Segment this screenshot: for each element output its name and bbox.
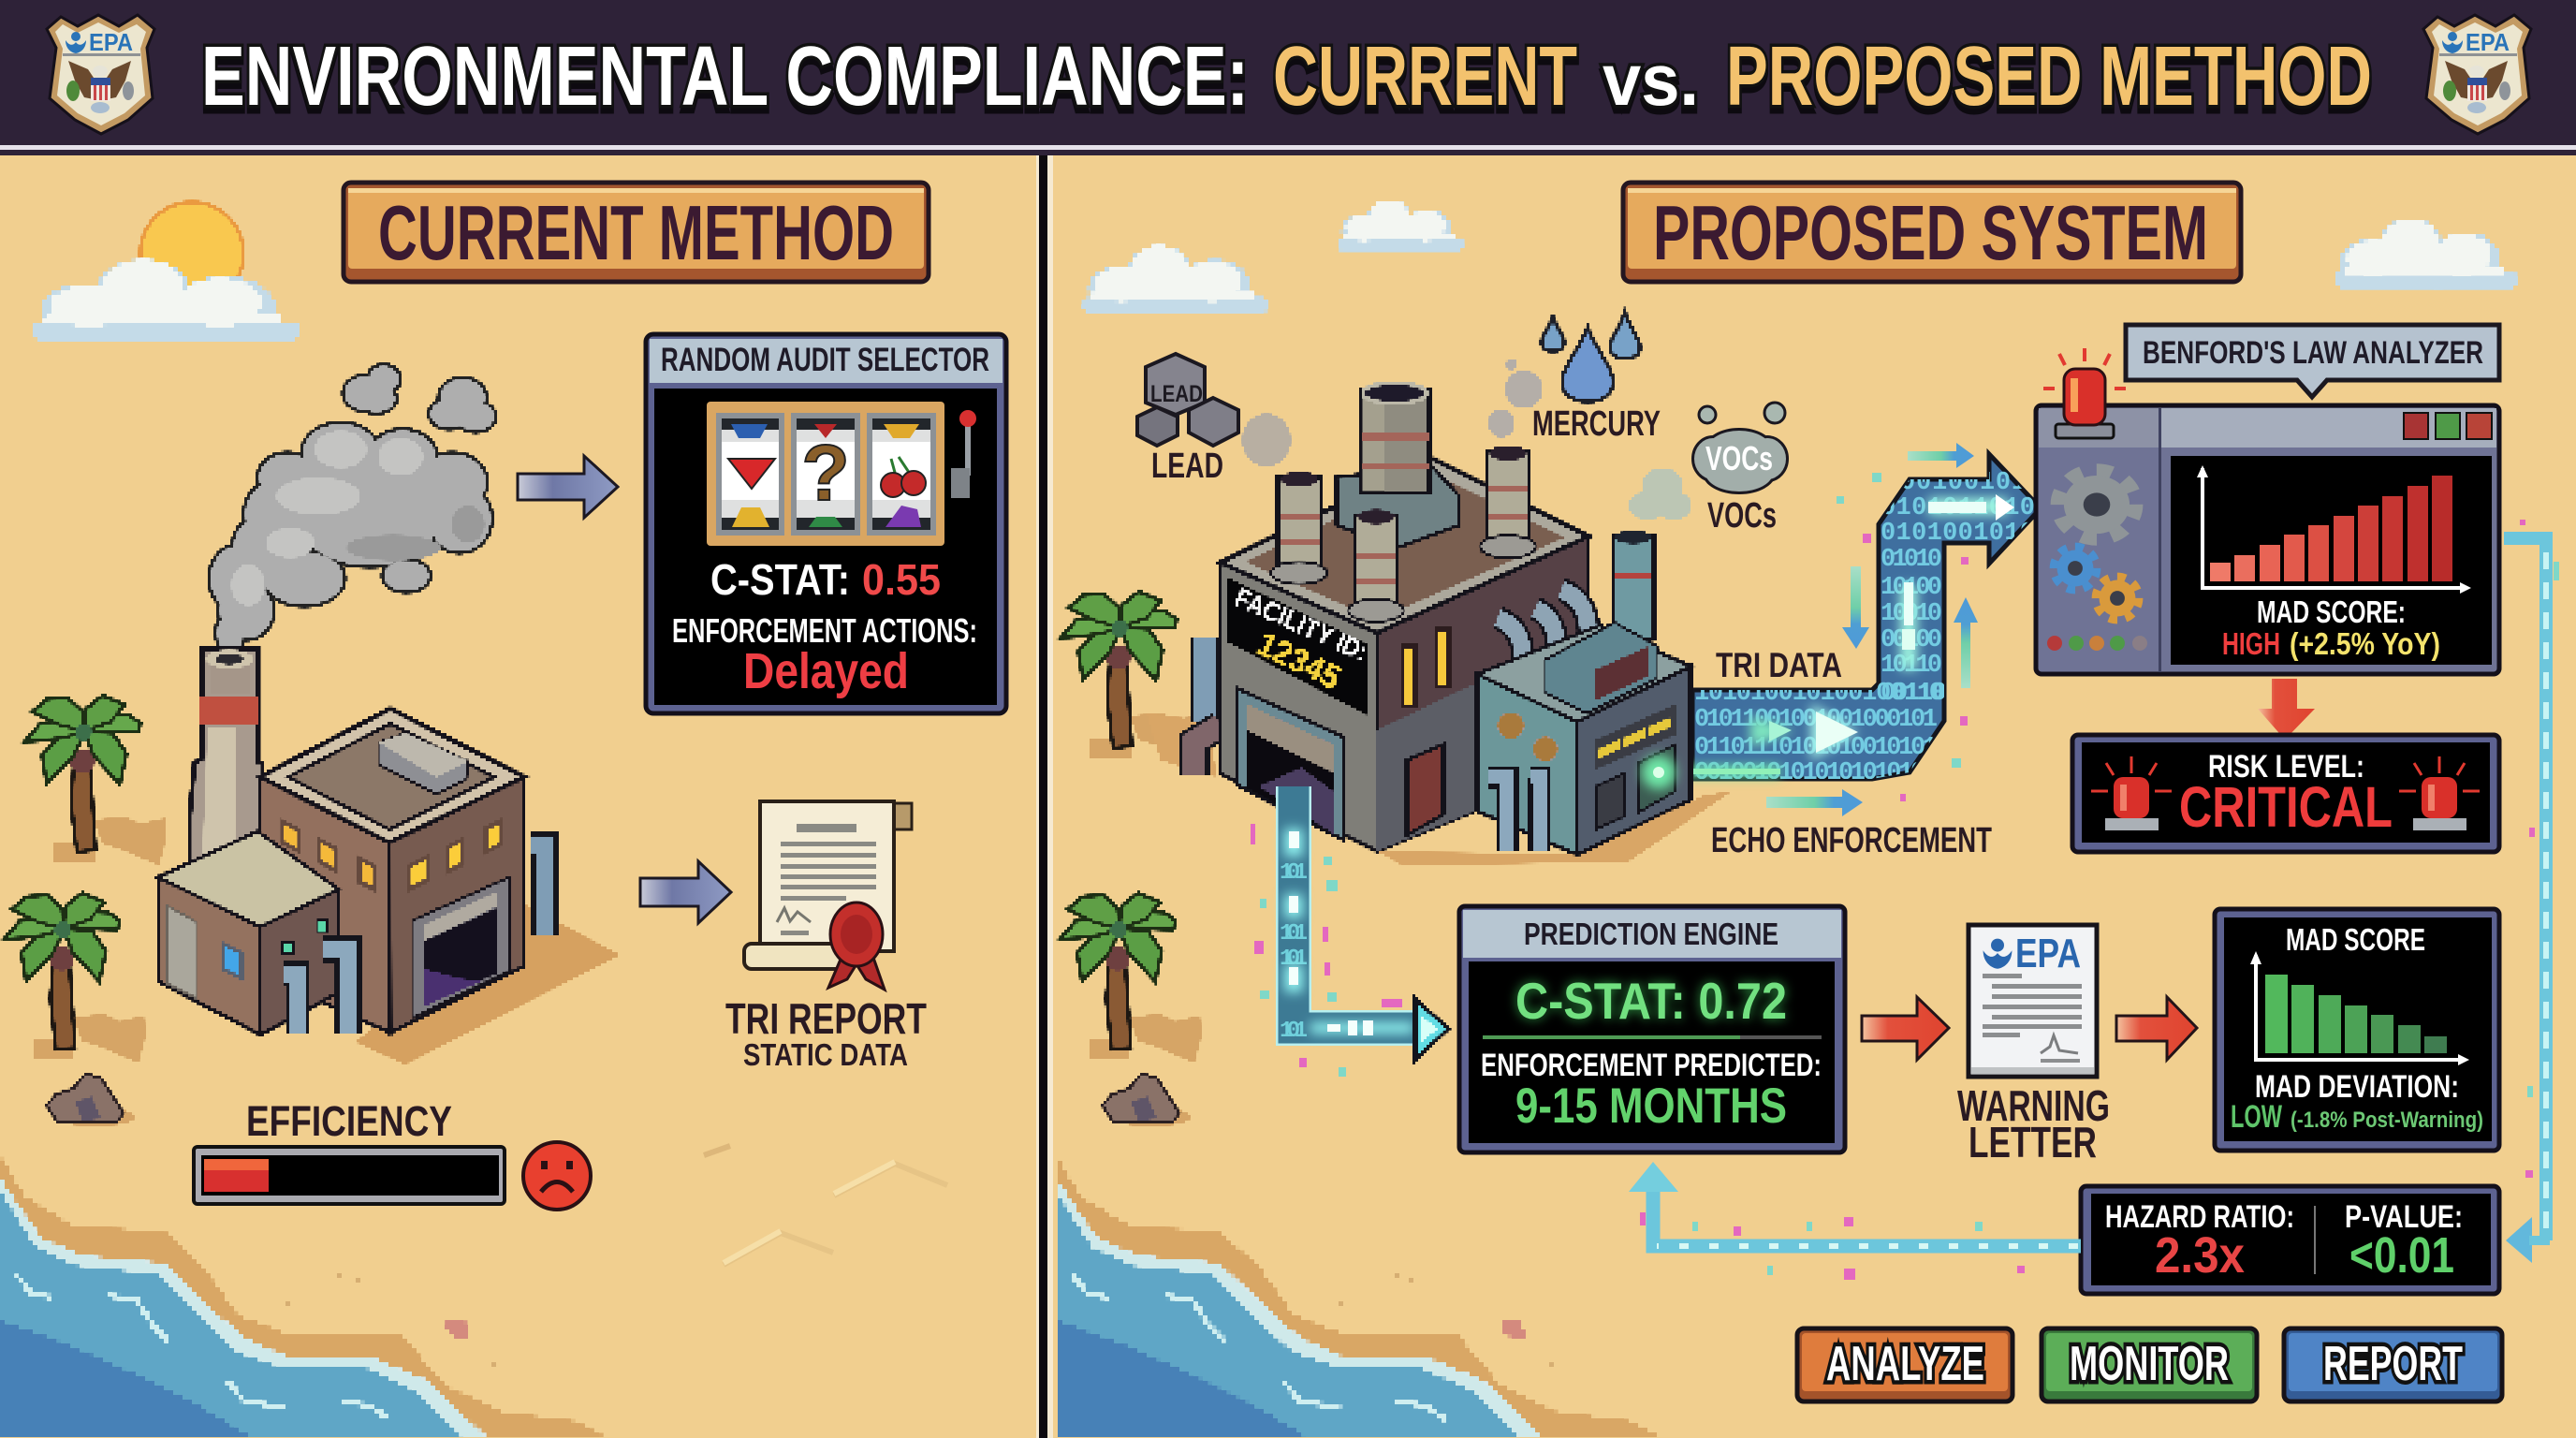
data pipe: TRI data: 00100	[1881, 626, 1942, 654]
title	[201, 30, 2372, 124]
panel: random audit selector: C-STAT:	[710, 555, 850, 604]
panel: risk level	[2072, 735, 2499, 852]
arrow: down small	[1842, 566, 1869, 649]
garage door	[1237, 688, 1343, 840]
palm upper left	[25, 696, 167, 865]
panel: prediction engine	[1459, 906, 1845, 1152]
data pipe: TRI data: 01010	[1881, 546, 1942, 574]
label: warning letter	[1957, 1081, 2110, 1167]
main block	[260, 777, 390, 1033]
title: vs.	[1603, 38, 1699, 121]
arrow: letter to MAD score	[2116, 997, 2197, 1060]
label: echo enforcement: ECHO ENFORCEMENT	[1711, 821, 1992, 860]
panel: current method	[5, 183, 1006, 1265]
glow: data flow	[1659, 494, 2014, 777]
data pipe: TRI data: 10010	[1881, 600, 1942, 628]
window buttons	[2404, 413, 2492, 439]
efficiency meter	[194, 1097, 505, 1204]
panel: hazard ratio and p-value	[2081, 1186, 2499, 1294]
icon: VOCs cloud: VOCs	[1705, 439, 1773, 477]
icon: EPA badge right: EPA	[2466, 28, 2510, 56]
panel: analyzer: HIGH	[2222, 626, 2280, 661]
arrow: up small	[1954, 597, 1978, 688]
windows	[282, 821, 374, 889]
panel: MAD score: (-1.8% Post-Warning)	[2291, 1108, 2483, 1133]
panel: hazard ratio and p-value: HAZARD RATIO:	[2105, 1199, 2294, 1235]
data confetti	[1251, 473, 2559, 1280]
button: analyze	[1797, 1328, 2012, 1401]
label: TRI report: STATIC DATA	[743, 1037, 908, 1072]
pipes	[283, 949, 348, 1034]
clouds right panel	[1083, 199, 2517, 315]
arrow: analyzer to risk	[2258, 679, 2315, 740]
panel divider	[1036, 155, 1053, 1438]
button: monitor	[2042, 1328, 2257, 1401]
rock right	[1103, 1074, 1191, 1126]
label: TRI data: TRI DATA	[1716, 646, 1842, 684]
panel: MAD score	[2215, 909, 2499, 1151]
flow arrow: factory to prediction engine: 101	[1280, 1019, 1308, 1044]
sign: facility ID	[1228, 578, 1372, 716]
ground shadow	[1377, 791, 1732, 866]
icon: lead ingots	[1137, 354, 1238, 446]
panel: risk level: RISK LEVEL:	[2208, 749, 2364, 785]
smoke near mercury	[1488, 359, 1543, 437]
factory: current	[158, 649, 620, 1064]
loading dock	[413, 877, 509, 1018]
roof stacks	[1271, 383, 1536, 622]
arrow: engine to warning letter	[1862, 997, 1949, 1060]
icon: EPA badge left	[47, 15, 154, 134]
heading: current method	[344, 183, 929, 282]
data pipe: TRI data	[1659, 454, 2041, 787]
label: mercury: MERCURY	[1532, 404, 1661, 444]
heading: proposed system: PROPOSED SYSTEM	[1653, 189, 2208, 276]
data pipe: TRI data: 01101110101010010101	[1694, 734, 1938, 762]
header bar	[0, 0, 2576, 155]
panel: MAD score: MAD DEVIATION:	[2255, 1069, 2459, 1105]
data pipe: TRI data: 00100101010101010101	[1694, 759, 1938, 787]
icon: TRI report scroll	[744, 801, 912, 990]
icon: VOCs cloud	[1694, 403, 1786, 492]
icon: sad face	[523, 1142, 591, 1210]
sand dunes	[704, 1146, 947, 1265]
arrow to audit selector	[518, 456, 618, 518]
icon: warning letter: EPA	[2015, 931, 2081, 976]
panel: prediction engine: 9-15 MONTHS	[1515, 1078, 1787, 1134]
slot machine	[707, 402, 976, 546]
button: analyze: ANALYZE	[1826, 1337, 1984, 1391]
flow arrow: factory to prediction engine: 101	[1280, 860, 1308, 886]
data pipe: TRI data: 10110	[1881, 652, 1942, 680]
label: lead: LEAD	[1151, 447, 1223, 486]
left pipe	[1194, 637, 1221, 775]
panel: hazard ratio and p-value: <0.01	[2349, 1227, 2454, 1284]
data pipe: TRI data: 0101001010	[1881, 520, 2035, 548]
panel: analyzer: MAD SCORE:	[2257, 594, 2406, 629]
data pipe: TRI data: 00100101	[1900, 469, 2027, 497]
button: report: REPORT	[2323, 1337, 2463, 1391]
red door	[1407, 744, 1443, 835]
rock left	[47, 1074, 135, 1126]
status lights	[2047, 636, 2147, 651]
icon: warning letter	[1969, 925, 2097, 1077]
chimney	[190, 649, 262, 866]
panel: prediction engine: PREDICTION ENGINE	[1524, 917, 1778, 951]
heading: proposed system	[1623, 183, 2241, 282]
roof	[1221, 459, 1588, 633]
panel: proposed system	[1061, 183, 2559, 1401]
cloud left	[33, 259, 300, 342]
chart: MAD falling bars	[2250, 951, 2469, 1065]
panel: random audit selector: RANDOM AUDIT SELECTOR	[661, 342, 989, 378]
data pipe: TRI data: 01011001001001000101	[1694, 706, 1938, 734]
rooftop unit	[379, 733, 468, 794]
data pipe: TRI data: 0101011010	[1881, 494, 2035, 522]
smoke plume	[211, 366, 494, 652]
buttons	[1797, 1328, 2502, 1401]
panel: analyzer	[2036, 348, 2499, 674]
arrow to TRI report	[640, 861, 731, 923]
gears	[2060, 472, 2133, 537]
button: report	[2284, 1328, 2502, 1401]
main block walls	[1221, 563, 1377, 851]
title: CURRENT	[1273, 30, 1577, 124]
panel: random audit selector: 0.55	[862, 555, 941, 604]
side pipe	[530, 845, 545, 936]
banner: Benford's Law analyzer: BENFORD'S LAW ANALYZER	[2143, 335, 2483, 371]
panel: prediction engine: ENFORCEMENT PREDICTED:	[1481, 1048, 1822, 1083]
efficiency meter: EFFICIENCY	[246, 1097, 452, 1145]
title: PROPOSED METHOD	[1726, 30, 2372, 124]
panel: random audit selector	[646, 334, 1006, 713]
palm lower right	[1061, 893, 1202, 1063]
palm lower left	[5, 893, 146, 1063]
panel: prediction engine: C-STAT: 0.72	[1515, 972, 1787, 1030]
shoreline right	[1056, 1155, 1663, 1438]
icon: alarm light	[2043, 348, 2126, 438]
icon: EPA badge left: EPA	[89, 28, 133, 56]
flow arrow: factory to prediction engine: 101	[1280, 946, 1308, 972]
panel: risk level: CRITICAL	[2179, 775, 2393, 839]
palm upper right	[1061, 592, 1203, 761]
label: TRI report: TRI REPORT	[725, 994, 927, 1043]
panel: hazard ratio and p-value: 2.3x	[2155, 1227, 2245, 1284]
panel: random audit selector: Delayed	[743, 643, 909, 699]
arrow: up-right small	[1908, 443, 1974, 468]
glow: emitter	[1642, 756, 1676, 789]
shoreline left	[0, 1155, 607, 1438]
icon: mercury droplets	[1542, 313, 1640, 402]
chart: MAD rising bars	[2197, 465, 2471, 594]
small block	[158, 877, 260, 1034]
flow arrow: factory to prediction engine	[1280, 786, 1448, 1060]
flow arrow: factory to prediction engine: 101	[1280, 921, 1308, 946]
sign: facility ID: FACILITY ID:	[1231, 582, 1372, 667]
sign: facility ID: 12345	[1251, 624, 1347, 697]
sun	[140, 202, 243, 305]
ground shadow	[356, 905, 620, 1064]
label: TRI report	[725, 994, 927, 1072]
smoke near lead	[1242, 414, 1291, 466]
arrow: echo	[1766, 789, 1863, 816]
panel: analyzer: (+2.5% YoY)	[2290, 626, 2440, 661]
button: monitor: MONITOR	[2070, 1337, 2229, 1391]
slot machine: ?	[801, 429, 850, 517]
return pipe: hazard to prediction engine	[1629, 1162, 2081, 1246]
label: warning letter: WARNING	[1957, 1081, 2110, 1130]
icon: EPA badge right	[2423, 15, 2531, 134]
factory: proposed	[1147, 383, 1732, 866]
label: VOCs: VOCs	[1707, 496, 1777, 536]
data pipe: TRI data: 10100	[1881, 574, 1942, 602]
icons: sirens	[2091, 756, 2480, 830]
label: warning letter: LETTER	[1969, 1118, 2097, 1167]
icon: lead ingots: LEAD	[1150, 381, 1203, 407]
banner: Benford's Law analyzer	[2126, 325, 2499, 397]
windows	[1402, 629, 1449, 706]
heading: current method: CURRENT METHOD	[378, 189, 894, 276]
data pipe: TRI data: 101010010100100110	[1694, 680, 1947, 708]
data pipe: TRI data: 00110	[1881, 680, 1944, 708]
annex	[1613, 536, 1654, 638]
title: ENVIRONMENTAL COMPLIANCE:	[201, 30, 1249, 124]
feedback pipe: analyzer to hazard	[2504, 538, 2550, 1263]
light vapor cloud	[1629, 468, 1691, 520]
panel: MAD score: MAD SCORE	[2286, 922, 2425, 957]
panel: MAD score: LOW	[2231, 1099, 2283, 1135]
panel: hazard ratio and p-value: P-VALUE:	[2345, 1199, 2463, 1235]
panel: random audit selector: ENFORCEMENT ACTIONS:	[672, 611, 977, 650]
